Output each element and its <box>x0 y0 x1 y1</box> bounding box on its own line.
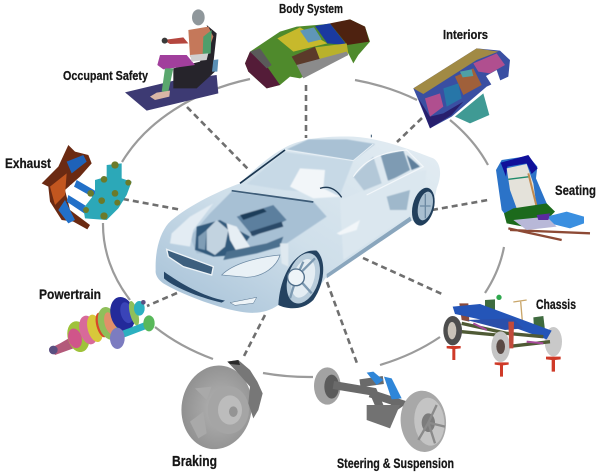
hub <box>208 386 249 434</box>
label: Exhaust: Exhaust <box>5 155 51 171</box>
windshield base and wipers <box>240 150 285 183</box>
disc <box>175 360 258 455</box>
dashed connectors from car to systems <box>123 85 488 366</box>
linkages <box>462 323 550 347</box>
headlight <box>222 255 280 277</box>
car body <box>156 137 440 313</box>
far wheel <box>314 367 341 405</box>
torso <box>188 27 213 57</box>
floor plate <box>125 75 218 111</box>
icon: seating frame <box>496 155 590 240</box>
headrest top <box>501 155 538 177</box>
arm <box>163 37 188 44</box>
head <box>192 9 205 25</box>
upper blue and brown <box>315 23 347 45</box>
center stack <box>455 68 482 95</box>
frame opening <box>507 164 537 208</box>
lower navy <box>418 98 463 128</box>
far wheels <box>545 327 562 356</box>
icon: body system shell <box>245 19 370 88</box>
car interior shading <box>170 139 427 267</box>
front wheel <box>278 249 326 308</box>
cushion <box>547 212 584 228</box>
tyres <box>443 316 462 345</box>
label: Occupant Safety: Occupant Safety <box>63 68 149 83</box>
shell <box>245 19 370 88</box>
links <box>333 380 400 415</box>
door yellow <box>315 43 348 60</box>
teal flanges <box>83 163 132 220</box>
label: Braking: Braking <box>172 453 217 470</box>
central transparent car <box>156 135 440 313</box>
shoe <box>150 91 170 100</box>
seat <box>173 25 217 88</box>
countershaft <box>120 320 153 338</box>
rear wheel <box>408 185 438 228</box>
green side <box>504 203 555 227</box>
icon: exhaust manifold <box>42 145 132 229</box>
rear maroon <box>245 52 280 88</box>
glove box hole <box>486 70 501 85</box>
back frame <box>496 156 550 217</box>
blue strut <box>367 372 383 385</box>
red stands <box>447 346 461 360</box>
icon: interiors dashboard <box>413 48 510 128</box>
icon: steering and suspension <box>314 367 449 454</box>
thigh <box>157 55 195 69</box>
icon: occupant safety dummy <box>125 9 218 111</box>
label: Interiors: Interiors <box>443 27 488 42</box>
shaft and bell <box>50 337 78 355</box>
side sill <box>327 217 412 278</box>
side windows <box>292 47 320 65</box>
green parts <box>496 295 502 300</box>
glove shell teal <box>455 93 489 123</box>
blue frame <box>453 304 552 339</box>
seat rails <box>508 228 590 240</box>
lower intake <box>164 272 225 303</box>
label: Body System: Body System <box>279 1 343 16</box>
top tan <box>413 48 498 94</box>
ring connecting the systems <box>103 79 504 377</box>
icon: chassis <box>443 295 562 377</box>
gear stack <box>64 319 93 355</box>
label: Steering & Suspension: Steering & Suspension <box>337 456 454 471</box>
shin <box>162 68 173 92</box>
heat shield <box>42 145 92 229</box>
label: Chassis: Chassis <box>536 296 576 312</box>
blue runners <box>67 155 87 173</box>
icon: brake disc and caliper <box>175 360 263 455</box>
near wheel <box>398 389 449 454</box>
fog lamp <box>230 297 257 305</box>
icon: powertrain <box>49 294 155 355</box>
sunroof <box>300 27 322 43</box>
blue housing <box>107 294 139 334</box>
door grey <box>297 52 348 78</box>
dash main <box>413 48 510 128</box>
grille <box>167 249 213 275</box>
caliper <box>227 360 263 418</box>
label: Powertrain: Powertrain <box>39 286 101 302</box>
roof yellow <box>277 27 327 52</box>
steering wheel <box>513 300 527 325</box>
pink vents <box>473 53 505 73</box>
antenna <box>370 135 373 137</box>
